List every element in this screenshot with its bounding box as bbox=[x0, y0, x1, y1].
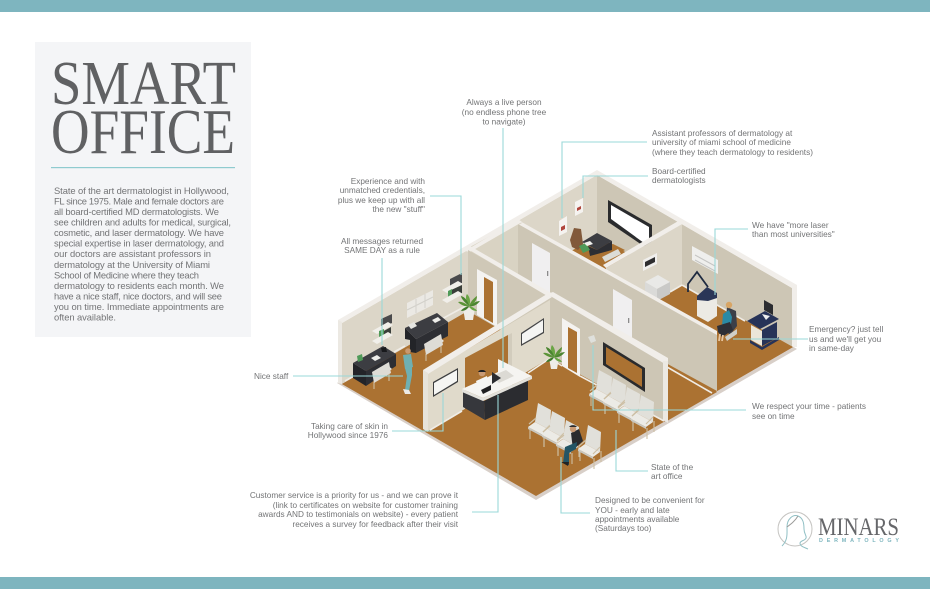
door: central bbox=[613, 289, 632, 342]
back room baseboard bbox=[667, 367, 712, 393]
panel: intro bbox=[35, 42, 251, 337]
seated man bbox=[561, 425, 583, 466]
label: state of the art office: art office bbox=[651, 472, 683, 481]
waiting room baseboards bbox=[430, 359, 664, 430]
label: taking care of skin bbox=[308, 422, 388, 440]
sign: reception wall bbox=[521, 318, 544, 346]
label: nice staff: Nice staff bbox=[254, 372, 289, 381]
label: taking care of skin: Hollywood since 1976 bbox=[308, 431, 388, 440]
label: always a live person: (no endless phone tree bbox=[462, 108, 547, 117]
label: board-certified bbox=[652, 167, 706, 185]
label: taking care of skin: Taking care of skin in bbox=[311, 422, 388, 431]
label: designed to be convenient: YOU - early and late bbox=[595, 506, 670, 515]
door: back corridor bbox=[532, 243, 550, 293]
intro text: our doctors are assistant professors in bbox=[54, 248, 211, 259]
label: messages returned: All messages returned bbox=[341, 237, 423, 246]
label: messages returned: SAME DAY as a rule bbox=[344, 246, 420, 255]
wall right of waiting room bbox=[547, 292, 668, 423]
label: assistant professors bbox=[652, 129, 813, 157]
title bbox=[51, 50, 236, 167]
laser room floor bbox=[668, 285, 793, 391]
certificates bbox=[559, 198, 583, 236]
label: designed to be convenient: appointments available bbox=[595, 515, 680, 524]
wall vent bbox=[643, 253, 657, 271]
label: more laser: than most universities" bbox=[752, 230, 835, 239]
label: emergency bbox=[809, 325, 883, 353]
label: respect your time bbox=[752, 402, 866, 421]
receptionist bbox=[476, 370, 491, 394]
office desk and chair bbox=[570, 228, 621, 262]
label: emergency: us and we'll get you bbox=[809, 335, 882, 344]
label: assistant professors: university of miami school of medicine bbox=[652, 138, 791, 147]
room one baseboard bbox=[345, 301, 475, 381]
label: always a live person bbox=[462, 98, 547, 126]
office window bbox=[608, 200, 652, 247]
intro text: School of Medicine where they teach bbox=[54, 269, 199, 280]
central wall bbox=[465, 219, 717, 391]
laser machine bbox=[688, 272, 717, 322]
intro text: see children and adults for medical, surgical, bbox=[54, 217, 231, 228]
door: room one bbox=[477, 269, 497, 327]
wall behind reception bbox=[466, 246, 553, 358]
intro text: State of the art dermatologist in Hollywood, bbox=[54, 185, 229, 196]
door: waiting room bbox=[562, 318, 580, 377]
label: more laser bbox=[752, 221, 835, 239]
sign: front wall bbox=[433, 368, 458, 397]
floor plan illustration bbox=[337, 170, 797, 500]
label: designed to be convenient bbox=[595, 496, 705, 533]
intro text: dermatology at the University of Miami bbox=[54, 259, 210, 270]
back right wall bbox=[597, 170, 797, 347]
skin machine bbox=[747, 300, 779, 350]
top band bbox=[0, 0, 930, 12]
desk: room one front bbox=[353, 346, 396, 386]
bookshelf lower bbox=[372, 314, 393, 344]
base slab bbox=[337, 232, 797, 500]
label: customer service: Customer service is a priority for us - and we can prove it bbox=[250, 491, 459, 500]
label: experience: Experience and with bbox=[351, 177, 425, 186]
callout lines bbox=[293, 128, 808, 513]
office floor bbox=[590, 244, 625, 262]
intro text: all board-certified MD dermatologists. We bbox=[54, 206, 219, 217]
intro text: have a nice staff, nice doctors, and will see bbox=[54, 290, 222, 301]
label: experience: plus we keep up with all bbox=[338, 196, 425, 205]
patient bbox=[717, 302, 737, 341]
logo tagline: DERMATOLOGY bbox=[819, 538, 899, 544]
label: more laser: We have "more laser bbox=[752, 221, 829, 230]
label: assistant professors: Assistant professors of dermatology at bbox=[652, 129, 793, 138]
intro text: dermatology to residents each month. We bbox=[54, 280, 224, 291]
plant: room one bbox=[458, 294, 480, 320]
label: designed to be convenient: Designed to be convenient for bbox=[595, 496, 705, 505]
cabinet bbox=[645, 275, 670, 301]
room one floor bbox=[342, 310, 552, 432]
reception wall bbox=[423, 294, 552, 432]
label: always a live person: to navigate) bbox=[482, 118, 526, 126]
label: state of the art office bbox=[651, 463, 694, 481]
visitor chair back bbox=[424, 334, 444, 361]
waiting chairs front row bbox=[528, 403, 601, 469]
desk: room one back bbox=[405, 313, 448, 353]
label: emergency: Emergency? just tell bbox=[809, 325, 883, 334]
back left wall bbox=[338, 170, 597, 384]
label: emergency: in same-day bbox=[809, 344, 855, 353]
plant: waiting room bbox=[543, 345, 565, 369]
reception desk bbox=[462, 359, 532, 420]
bottom band bbox=[0, 577, 930, 589]
floor bbox=[342, 235, 793, 496]
intro text: FL since 1975. Male and female doctors are bbox=[54, 196, 224, 206]
intro text: you on time. Immediate appointments are bbox=[54, 301, 224, 312]
label: assistant professors: (where they teach dermatology to residents) bbox=[652, 148, 813, 157]
label: always a live person: Always a live person bbox=[466, 98, 542, 107]
label: respect your time: see on time bbox=[752, 412, 795, 421]
laser room baseboard bbox=[670, 285, 745, 321]
intro text: cosmetic, and laser dermatology. We have bbox=[54, 227, 224, 238]
back room floor behind waiting room bbox=[665, 366, 717, 421]
label: customer service: (link to certificates on website for customer training bbox=[273, 501, 458, 510]
nurse bbox=[403, 348, 413, 394]
label: state of the art office: State of the bbox=[651, 463, 694, 472]
label: board-certified: dermatologists bbox=[652, 176, 706, 185]
wall sensor bbox=[588, 335, 596, 343]
label: designed to be convenient: (Saturdays too) bbox=[595, 524, 652, 533]
intro text: special expertise in laser dermatology, and bbox=[54, 238, 224, 249]
waiting room wall screen bbox=[603, 342, 645, 392]
intro text: often available. bbox=[54, 312, 116, 322]
wall shelves room one bbox=[407, 290, 433, 318]
logo wordmark: MINARS bbox=[818, 514, 899, 541]
label: experience: unmatched credentials, bbox=[340, 186, 425, 195]
label: customer service: receives a survey for feedback after their visit bbox=[292, 520, 459, 529]
label: customer service bbox=[250, 491, 459, 529]
label: experience bbox=[338, 177, 425, 214]
visitor chair front bbox=[372, 362, 392, 389]
label: messages returned bbox=[341, 237, 423, 255]
logo icon bbox=[778, 512, 812, 549]
label: board-certified: Board-certified bbox=[652, 167, 706, 176]
label: experience: the new "stuff" bbox=[372, 205, 425, 214]
title: OFFICE bbox=[51, 96, 235, 167]
label: respect your time: We respect your time - patients bbox=[752, 402, 866, 411]
bookshelf upper bbox=[442, 273, 463, 303]
logo bbox=[778, 512, 899, 549]
shelves bbox=[692, 246, 718, 274]
title: SMART bbox=[51, 50, 236, 118]
label: customer service: awards AND to testimonials on website) - every patient bbox=[258, 510, 459, 519]
waiting chairs back row bbox=[589, 370, 654, 439]
divider wall between office and laser room bbox=[603, 220, 684, 328]
intro text bbox=[54, 185, 231, 322]
